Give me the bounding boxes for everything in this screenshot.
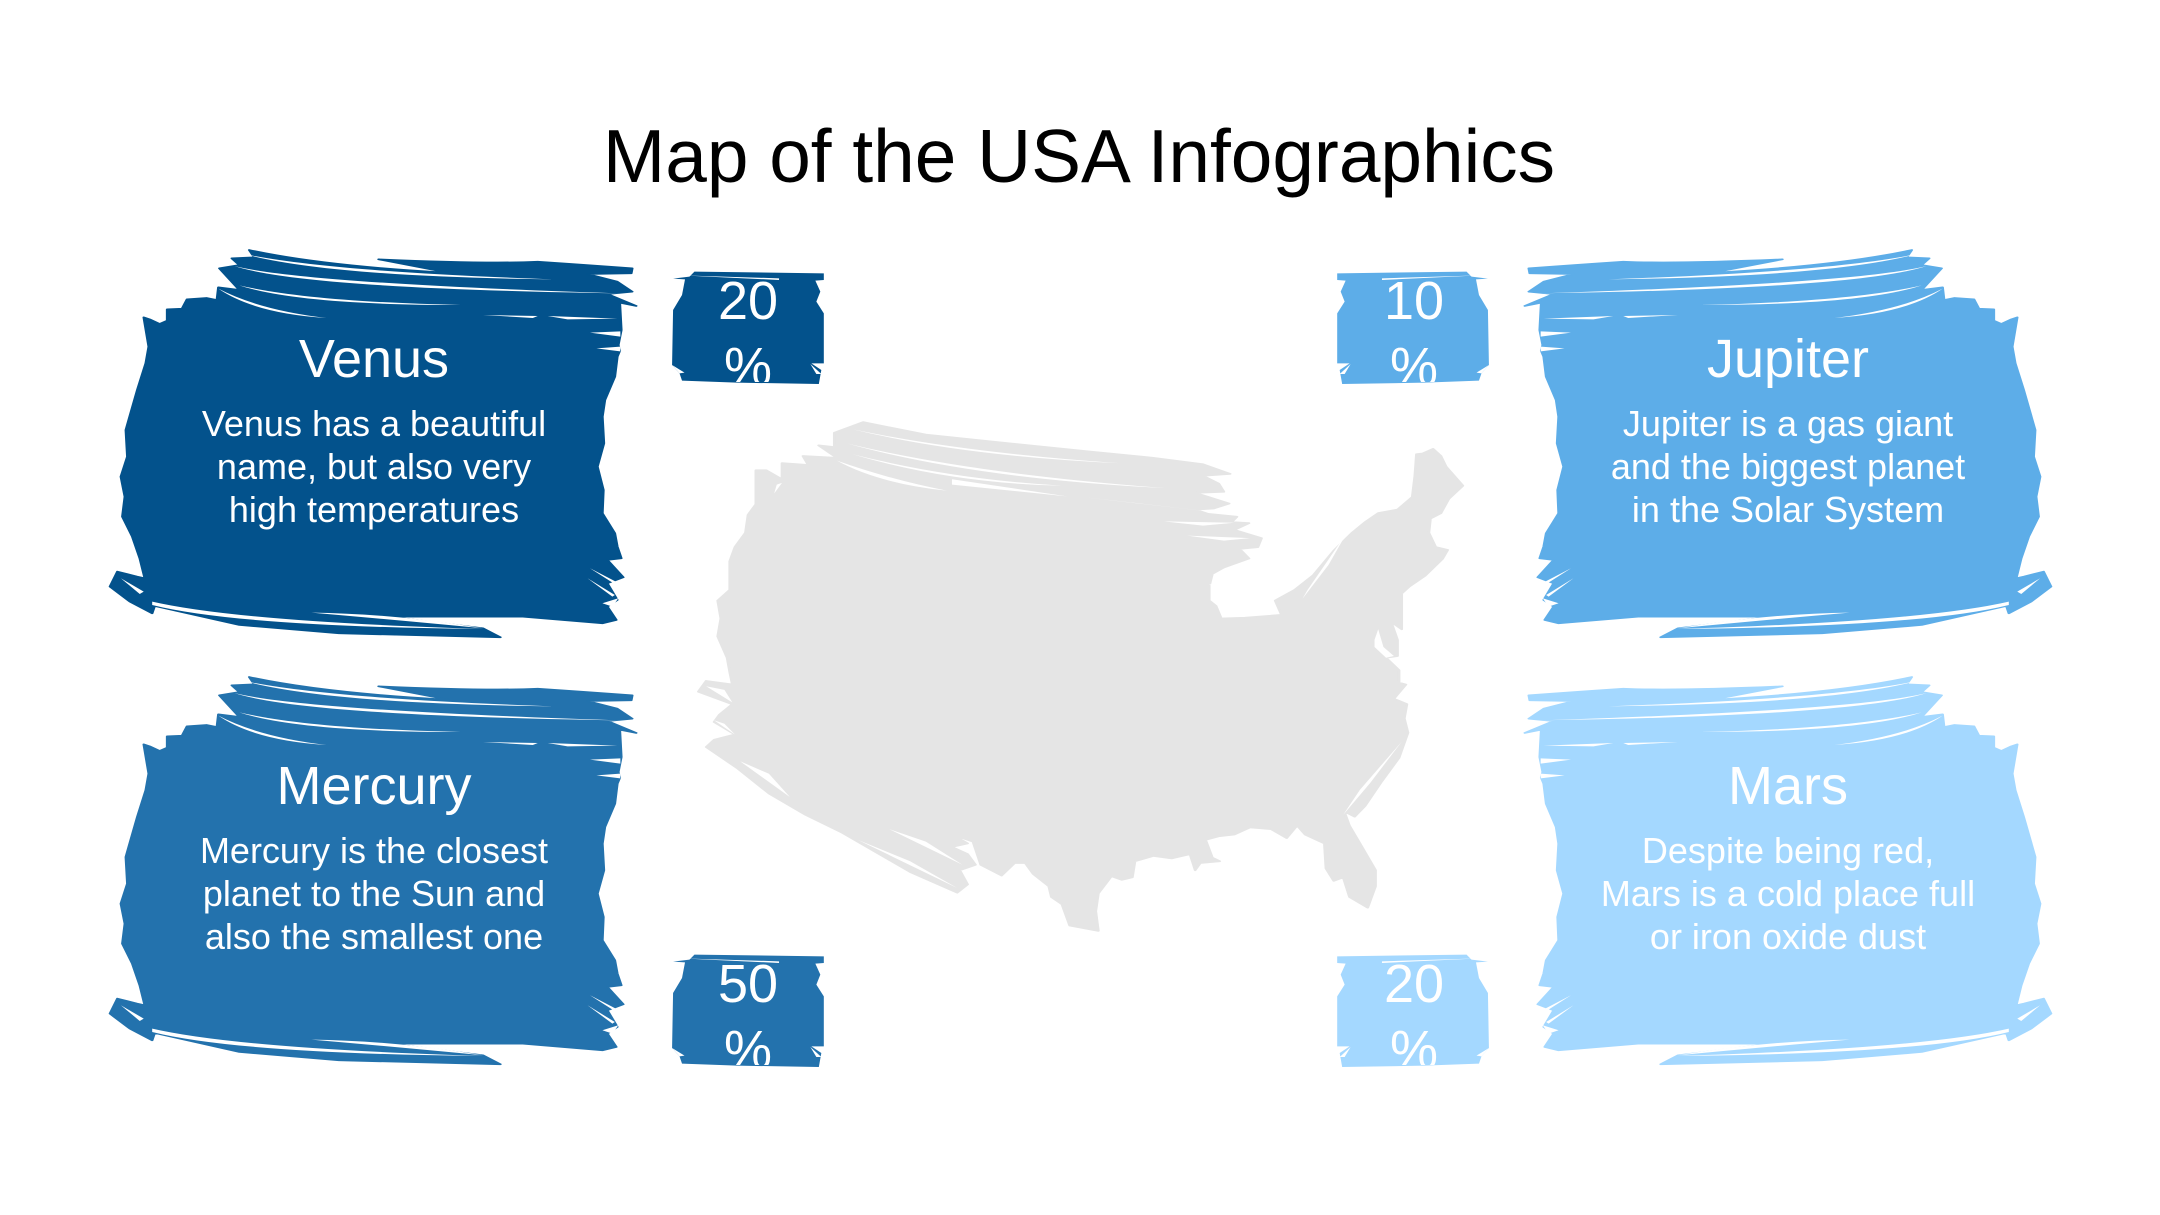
- text: Jupiter description: Jupiter is a gas giant: [1623, 403, 1953, 444]
- brush background: Mercury: [110, 677, 636, 1064]
- stat: Mercury 50%: 50: [718, 954, 778, 1014]
- heading: Mercury: Mercury: [276, 756, 472, 816]
- brush background: Mars: [1525, 677, 2051, 1064]
- stat: Venus 20%: %: [724, 337, 772, 397]
- text: Mars description: Mars is a cold place full: [1601, 873, 1975, 914]
- text: Mars description: Despite being red,: [1642, 830, 1934, 871]
- map of the USA: [698, 422, 1463, 931]
- text: Mercury description: also the smallest one: [205, 916, 543, 957]
- brush background: Venus: [110, 250, 636, 637]
- text: Mercury description: planet to the Sun and: [203, 873, 545, 914]
- panel: Mercury: [110, 677, 636, 1064]
- stat: Mercury 50%: [672, 954, 824, 1080]
- brush background: Jupiter: [1525, 250, 2051, 637]
- text: Mars description: or iron oxide dust: [1650, 916, 1926, 957]
- text: Jupiter description: and the biggest planet: [1611, 446, 1965, 487]
- stat: Mars 20%: 20: [1384, 954, 1444, 1014]
- text: Jupiter description: in the Solar System: [1632, 489, 1944, 530]
- stat: Venus 20%: [672, 271, 824, 397]
- stat: Jupiter 10%: %: [1390, 337, 1438, 397]
- panel: Mars: [1525, 677, 2051, 1064]
- title: Map of the USA Infographics: [603, 114, 1555, 198]
- stat: Mars 20%: %: [1390, 1020, 1438, 1080]
- stat: Venus 20%: 20: [718, 271, 778, 331]
- panel: Jupiter: [1525, 250, 2051, 637]
- heading: Mars: Mars: [1728, 756, 1848, 816]
- stat: Jupiter 10%: [1337, 271, 1489, 397]
- text: Venus description: Venus has a beautiful: [202, 403, 546, 444]
- text: Venus description: name, but also very: [217, 446, 531, 487]
- stat: Jupiter 10%: 10: [1384, 271, 1444, 331]
- heading: Jupiter: Jupiter: [1707, 329, 1869, 389]
- panel: Venus: [110, 250, 636, 637]
- stat: Mercury 50%: %: [724, 1020, 772, 1080]
- text: Mercury description: Mercury is the closest: [200, 830, 548, 871]
- text: Venus description: high temperatures: [229, 489, 519, 530]
- heading: Venus: Venus: [299, 329, 449, 389]
- stat: Mars 20%: [1337, 954, 1489, 1080]
